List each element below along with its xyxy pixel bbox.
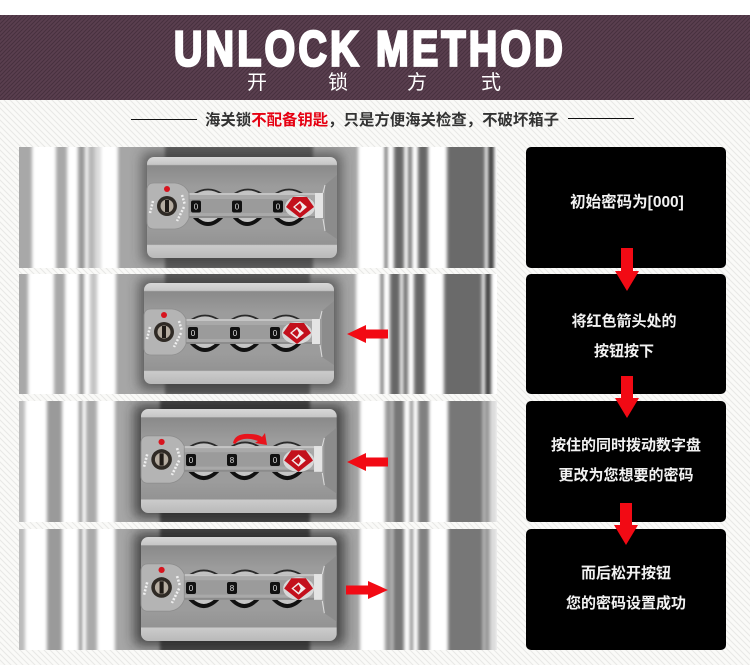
top white strip xyxy=(0,0,750,15)
lock xyxy=(141,537,337,641)
card: step 1 xyxy=(526,147,726,268)
lock xyxy=(147,157,337,258)
arrow: release button xyxy=(346,581,388,599)
arrow: press button xyxy=(347,325,388,343)
panel: step 2 photo xyxy=(15,268,497,400)
lock: 0 xyxy=(235,202,240,212)
subtitle: 开 xyxy=(247,72,267,94)
subtitle: 方 xyxy=(407,71,427,94)
panel: step 4 photo xyxy=(15,523,497,656)
header banner xyxy=(0,15,750,100)
lock: 0 xyxy=(273,329,278,338)
subtitle: 锁 xyxy=(328,71,348,94)
card: step 4 xyxy=(526,529,726,650)
note line: 海关锁不配备钥匙，只是方便海关检查，不破坏箱子 xyxy=(205,110,559,129)
lock: 0 xyxy=(191,329,196,338)
lock: 0 xyxy=(273,584,278,593)
subtitle: 式 xyxy=(481,71,501,94)
arrow: press button xyxy=(347,453,388,471)
panel: step 1 photo xyxy=(19,147,497,268)
panel: step 3 photo xyxy=(15,395,497,528)
card: step 4: 而后松开按钮 xyxy=(581,564,671,582)
lock: 0 xyxy=(189,456,194,465)
card: step 1: 初始密码为[000] xyxy=(570,192,684,211)
card: step 4: 您的密码设置成功 xyxy=(566,594,686,612)
lock: 0 xyxy=(189,584,194,593)
card: step 2: 将红色箭头处的 xyxy=(571,312,677,330)
lock: 8 xyxy=(230,456,235,465)
arrow: turn dial xyxy=(233,433,267,445)
lock: 0 xyxy=(194,202,199,212)
arrow: step 3 to 4 xyxy=(614,503,638,545)
card: step 2: 按钮按下 xyxy=(594,342,654,360)
card: step 3: 按住的同时拨动数字盘 xyxy=(551,436,701,454)
card: step 3 xyxy=(526,401,726,522)
lock: 8 xyxy=(230,584,235,593)
lock xyxy=(141,409,337,513)
lock xyxy=(144,283,334,384)
subtitle xyxy=(247,71,501,94)
card: step 2 xyxy=(526,274,726,394)
title: UNLOCK METHOD xyxy=(174,22,566,77)
lock: 0 xyxy=(273,456,278,465)
lock: 0 xyxy=(276,202,281,212)
card: step 3: 更改为您想要的密码 xyxy=(558,466,694,484)
lock: 0 xyxy=(233,329,238,338)
arrow: step 2 to 3 xyxy=(615,376,639,418)
arrow: step 1 to 2 xyxy=(615,248,639,291)
